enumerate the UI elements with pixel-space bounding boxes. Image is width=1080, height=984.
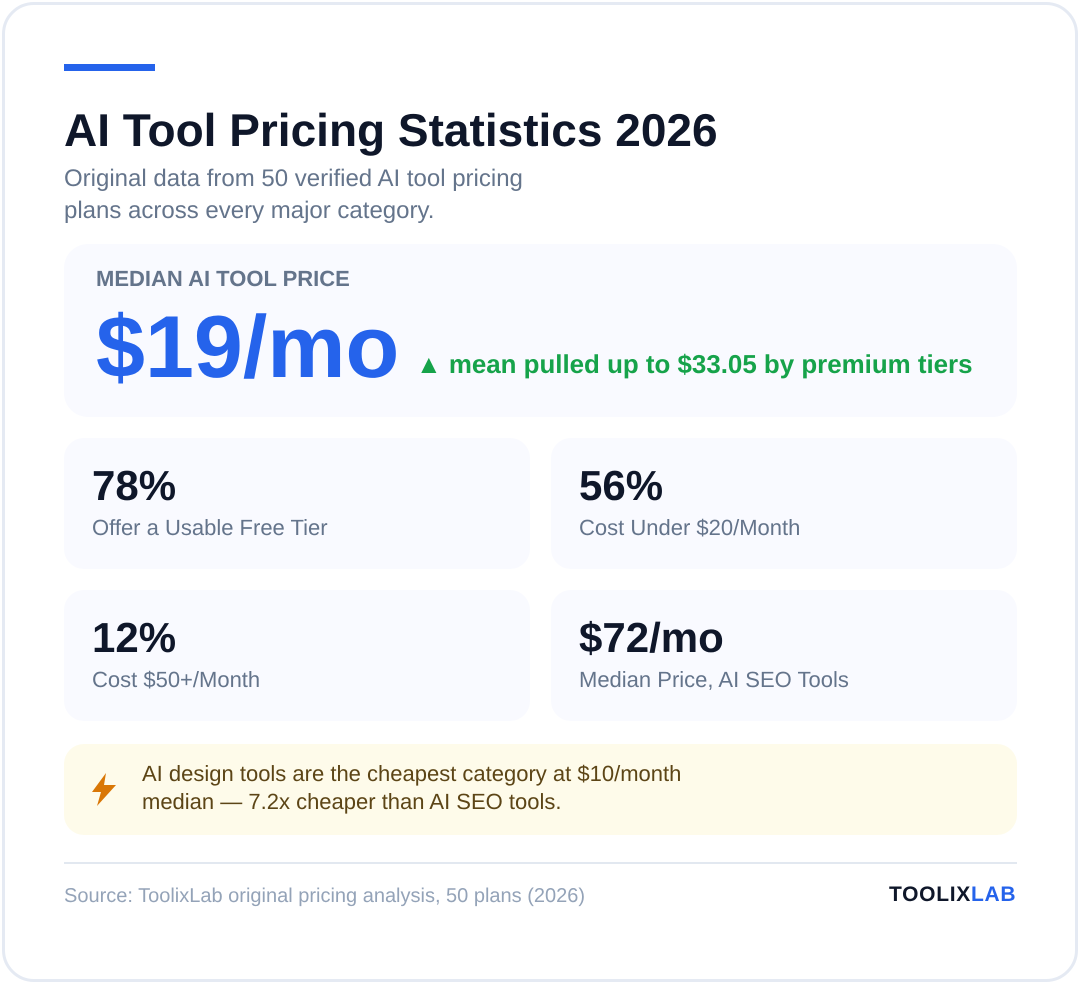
stat card: $50+ — [64, 590, 530, 721]
title: AI Tool Pricing Statistics 2026 — [64, 104, 718, 156]
accent bar — [64, 64, 155, 71]
callout — [64, 744, 1017, 835]
subtitle: Original data from 50 verified AI tool pricing — [64, 165, 523, 192]
stat label: Cost $50+/Month — [92, 667, 260, 692]
panel: median price — [64, 244, 1017, 417]
callout text: AI design tools are the cheapest category at $10/month — [142, 761, 681, 786]
stat value: 56% — [579, 462, 663, 509]
median value: $19/mo — [96, 297, 399, 396]
subtitle: plans across every major category. — [64, 197, 434, 224]
stat value: 12% — [92, 614, 176, 661]
subtitle — [64, 165, 523, 224]
stat value: 78% — [92, 462, 176, 509]
callout text — [142, 761, 681, 814]
icon: lightning bolt — [92, 773, 116, 806]
brand logo: TOOLIXLAB — [889, 883, 1016, 906]
median label: MEDIAN AI TOOL PRICE — [96, 266, 350, 291]
divider — [64, 862, 1017, 864]
stat value: $72/mo — [579, 614, 724, 661]
stat card: free tier — [64, 438, 530, 569]
stat label: Median Price, AI SEO Tools — [579, 667, 849, 692]
source: Source: ToolixLab original pricing analysis, 50 plans (2026) — [64, 885, 585, 907]
stat card: under $20 — [551, 438, 1017, 569]
callout text: median — 7.2x cheaper than AI SEO tools. — [142, 789, 561, 814]
mean note: ▲ mean pulled up to $33.05 by premium tiers — [416, 351, 973, 379]
stat label: Cost Under $20/Month — [579, 515, 800, 540]
stat card: SEO median — [551, 590, 1017, 721]
stat label: Offer a Usable Free Tier — [92, 515, 328, 540]
